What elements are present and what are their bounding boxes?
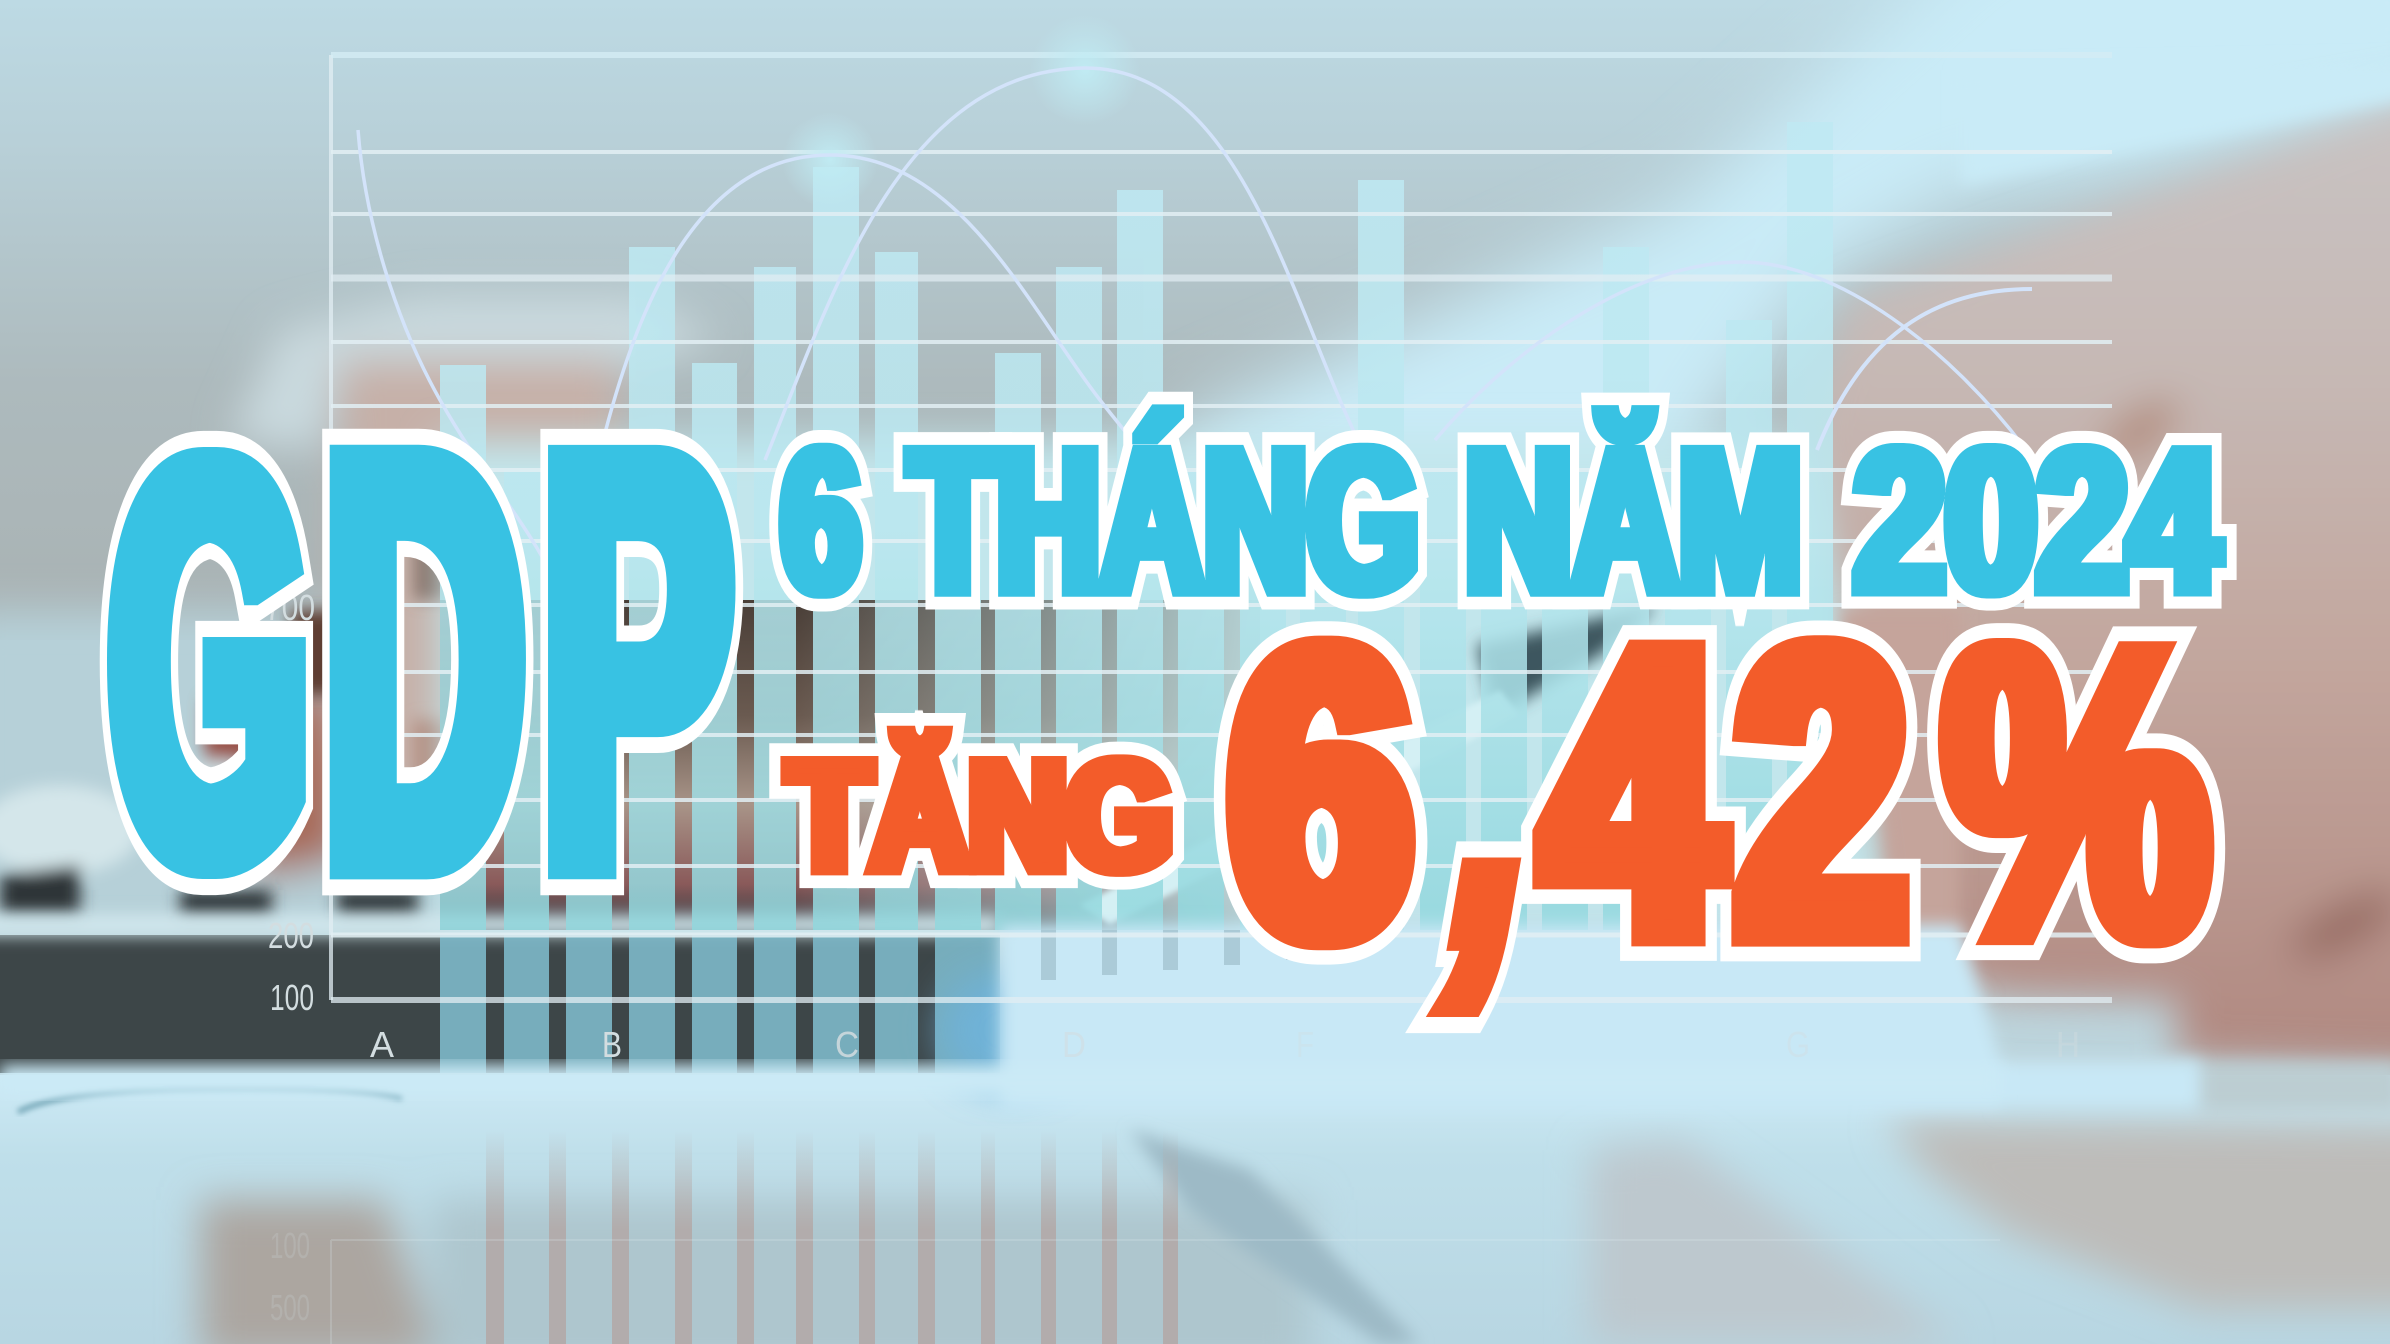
heading: GDP: P bbox=[543, 333, 731, 989]
key figure: 6,42%: 6 bbox=[1230, 565, 1411, 1020]
key figure: 6,42%: 4 bbox=[1544, 566, 1722, 1020]
key figure: 6,42%: , bbox=[1431, 551, 1575, 1028]
chart axis labels: 200 bbox=[268, 915, 314, 956]
heading: 6 THÁNG NĂM 2024: 2024 bbox=[1854, 407, 2219, 635]
decorative arc bbox=[18, 1088, 402, 1112]
chart axis labels: C bbox=[835, 1024, 859, 1065]
heading: 6 THÁNG NĂM 2024: NĂM bbox=[1465, 407, 1802, 635]
key figure: 6,42%: 2 bbox=[1737, 566, 1906, 1020]
heading: 6 THÁNG NĂM 2024: NĂM bbox=[1465, 407, 1802, 635]
heading: GDP bbox=[110, 333, 731, 989]
heading: 6 THÁNG NĂM 2024 bbox=[781, 407, 2219, 635]
heading: GDP: D bbox=[325, 334, 524, 989]
chart axis labels: F bbox=[1296, 1024, 1314, 1065]
chart axis labels: H bbox=[2056, 1024, 2080, 1065]
chart axis labels: 100 bbox=[270, 977, 314, 1018]
chart grid lines bbox=[331, 55, 2112, 1344]
key figure: 6,42%: % bbox=[1943, 560, 2210, 1024]
chart axis labels: A bbox=[370, 1024, 394, 1065]
chart axis labels: 500 bbox=[270, 1287, 310, 1328]
heading: 6 THÁNG NĂM 2024: THÁNG bbox=[909, 407, 1419, 635]
key figure: 6,42%: 6 bbox=[1230, 565, 1411, 1020]
key figure: 6,42% bbox=[1230, 551, 2210, 1028]
chart axis labels: G bbox=[1786, 1024, 1810, 1065]
heading: GDP: D bbox=[325, 334, 524, 989]
heading: 6 THÁNG NĂM 2024: THÁNG bbox=[909, 407, 1419, 635]
heading: 6 THÁNG NĂM 2024: 6 bbox=[781, 408, 860, 635]
heading: GDP: G bbox=[110, 346, 308, 979]
heading: GDP: G bbox=[110, 346, 308, 979]
chart axis labels bbox=[265, 587, 2080, 1328]
heading: GDP: P bbox=[543, 333, 731, 989]
key figure: 6,42%: % bbox=[1943, 560, 2210, 1024]
key figure: 6,42%: 2 bbox=[1737, 566, 1906, 1020]
key figure: 6,42%: 4 bbox=[1544, 566, 1722, 1020]
heading: 6 THÁNG NĂM 2024: 2024 bbox=[1854, 407, 2219, 635]
line chart curves bbox=[358, 15, 2032, 600]
heading: 6 THÁNG NĂM 2024: 6 bbox=[781, 408, 860, 635]
chart axis labels: D bbox=[1062, 1024, 1086, 1065]
chart axis labels: 700 bbox=[265, 587, 315, 628]
heading: TĂNG: TĂNG bbox=[788, 729, 1172, 902]
heading: TĂNG: TĂNG bbox=[788, 729, 1172, 902]
chart axis labels: 100 bbox=[270, 1225, 310, 1266]
chart axis labels: B bbox=[602, 1024, 622, 1065]
key figure: 6,42%: , bbox=[1431, 551, 1575, 1028]
